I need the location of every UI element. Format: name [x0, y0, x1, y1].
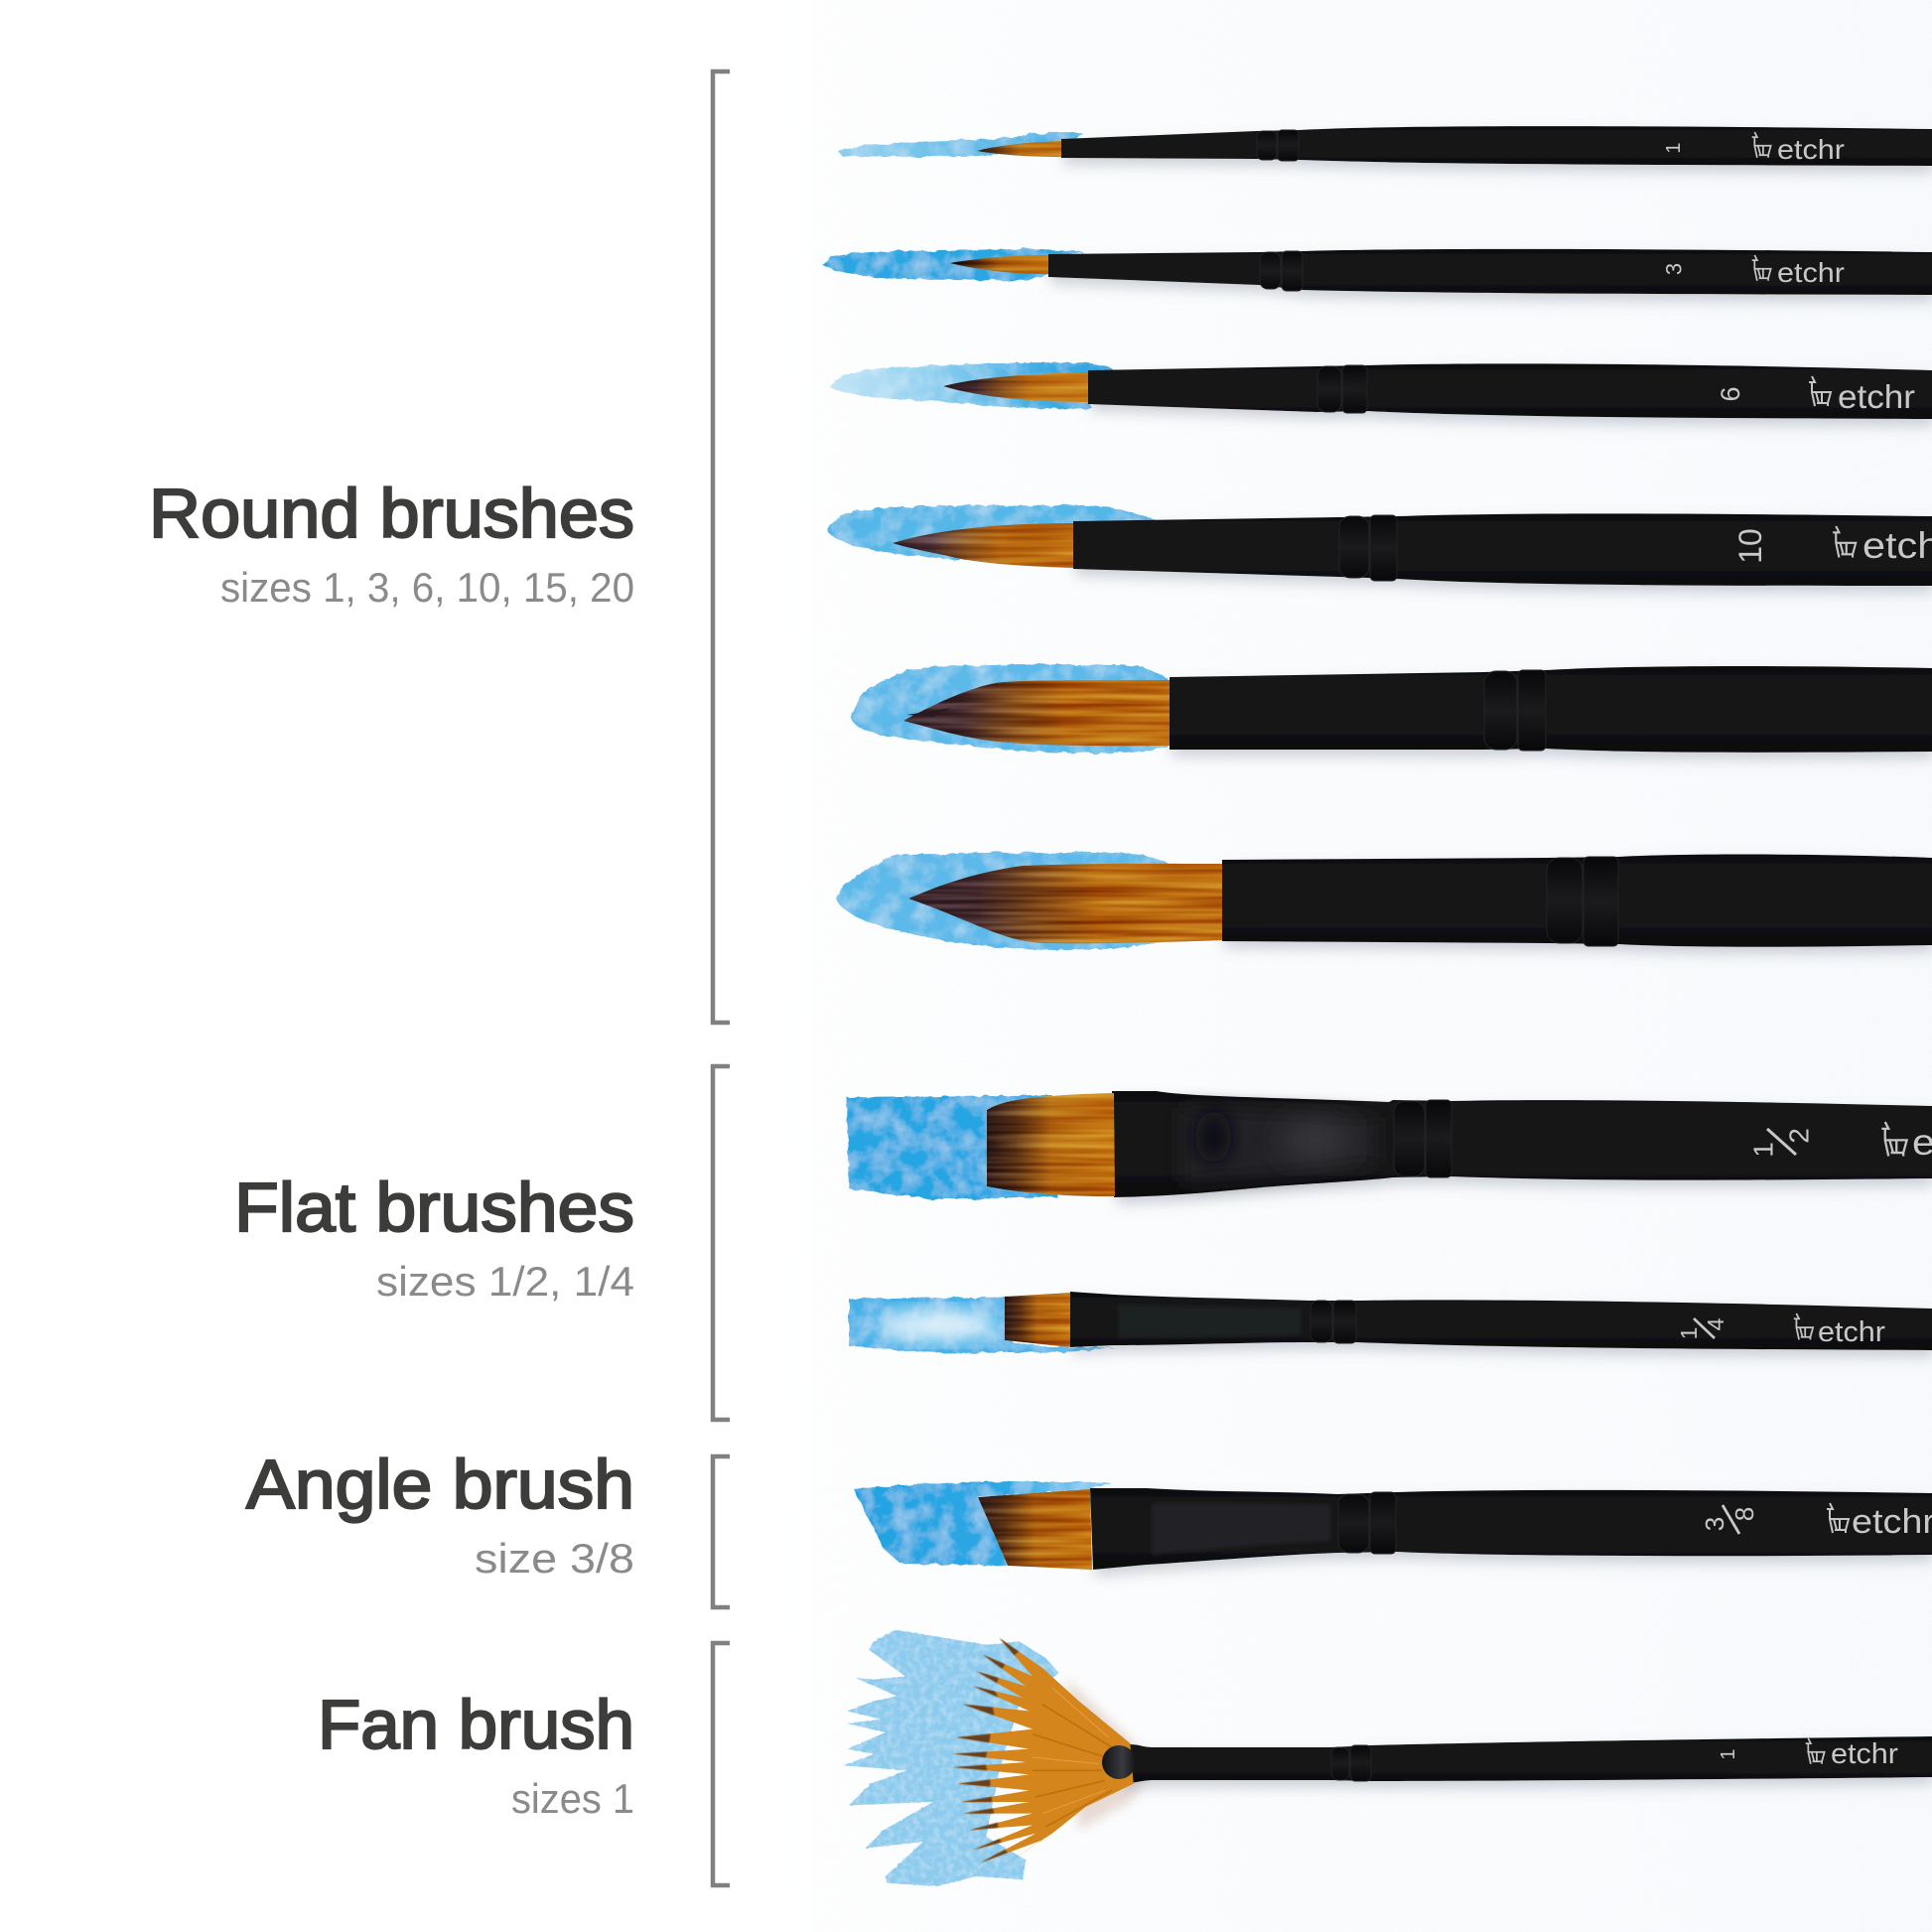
paint wash highlight — [877, 1311, 1000, 1340]
paint stroke — [822, 249, 1084, 280]
logo: etchr — [1818, 1316, 1885, 1348]
size number: 6 — [1716, 386, 1745, 402]
logo — [1881, 1122, 1932, 1163]
logo — [1794, 1313, 1885, 1348]
bracket: round brushes — [713, 71, 730, 1023]
handle — [1170, 666, 1932, 753]
ferrule shine — [1152, 1503, 1330, 1555]
ferrule shine — [1181, 1108, 1376, 1181]
handle — [1090, 1488, 1932, 1570]
handle — [1222, 854, 1932, 947]
size number: 1 — [1676, 1327, 1702, 1339]
panel: angle brush label — [246, 1446, 730, 1607]
panel: round brushes label — [149, 71, 730, 1023]
size number: 2 — [1783, 1128, 1815, 1144]
heading: round brushes: Round brushes — [149, 475, 634, 552]
handle — [1088, 363, 1932, 419]
ferrule rings — [1317, 365, 1367, 413]
logo: etchr — [1838, 378, 1915, 415]
bristles — [950, 255, 1048, 274]
heading: angle brush: Angle brush — [246, 1446, 634, 1523]
sizes: angle brush: size 3/8 — [475, 1535, 634, 1582]
size number: 1 — [1663, 142, 1685, 154]
fan shadow — [1065, 1678, 1149, 1830]
heading: fan brush: Fan brush — [318, 1686, 634, 1763]
handle — [1070, 1292, 1932, 1350]
logo: etchr — [1777, 134, 1845, 165]
paint stroke — [851, 664, 1168, 753]
brush: angle size 3/8 — [854, 1482, 1932, 1570]
bristles — [943, 372, 1088, 402]
handle — [1112, 1091, 1932, 1197]
bristles — [978, 1489, 1092, 1570]
handle — [1048, 249, 1932, 295]
paint stroke — [830, 362, 1117, 409]
bristles — [903, 680, 1170, 746]
bristle split tip — [906, 708, 951, 717]
size number: 10 — [1732, 528, 1768, 564]
brush: round size 10 — [827, 505, 1932, 586]
brush: round size 15 — [851, 664, 1932, 753]
size number: 4 — [1703, 1317, 1728, 1330]
size number: 3 — [1662, 263, 1686, 275]
logo: etchr — [1831, 1738, 1898, 1770]
brush: fan size 1 — [844, 1630, 1932, 1886]
ferrule rings — [1260, 251, 1303, 291]
heading: flat brushes: Flat brushes — [234, 1169, 634, 1246]
sizes: flat brushes: sizes 1/2, 1/4 — [376, 1258, 634, 1305]
sizes: round brushes: sizes 1, 3, 6, 10, 15, 20 — [220, 564, 634, 611]
bristles — [977, 141, 1061, 157]
size number — [1676, 1317, 1728, 1339]
ferrule rings — [1331, 1745, 1371, 1781]
brush: round size 3 — [822, 249, 1932, 295]
paint stroke — [849, 1297, 1114, 1353]
bracket: angle brush — [713, 1456, 730, 1607]
brush: round size 1 — [838, 126, 1932, 166]
paint stroke — [854, 1482, 1112, 1566]
logo: etchr — [1852, 1503, 1932, 1541]
ferrule rings — [1547, 857, 1618, 946]
bristles — [893, 523, 1073, 568]
panel: fan brush label — [318, 1643, 730, 1885]
logo — [1752, 132, 1845, 165]
handle — [1122, 1736, 1932, 1783]
ferrule rings — [1339, 515, 1397, 581]
ferrule rings — [1484, 670, 1546, 751]
panel: flat brushes label — [234, 1066, 730, 1420]
brush: flat size 1/2 — [847, 1091, 1932, 1199]
ferrule rings — [1394, 1100, 1451, 1177]
size number: 8 — [1729, 1507, 1759, 1521]
ferrule rings — [1338, 1492, 1396, 1554]
paint stroke — [844, 1630, 1059, 1886]
paint stroke — [847, 1095, 1056, 1199]
logo — [1752, 255, 1845, 288]
brush: round size 20 — [836, 853, 1932, 950]
size number — [1747, 1128, 1815, 1158]
paint stroke — [827, 505, 1161, 560]
handle — [1061, 126, 1932, 166]
bristles — [908, 864, 1222, 943]
size number: 3 — [1700, 1517, 1729, 1531]
ferrule rings — [1257, 130, 1299, 161]
size number: 1 — [1747, 1142, 1779, 1158]
bracket: fan brush — [713, 1643, 730, 1885]
logo — [1806, 1738, 1898, 1770]
ferrule ball — [1102, 1745, 1136, 1779]
size number: 1 — [1718, 1748, 1739, 1760]
size number — [1700, 1505, 1759, 1534]
bracket: flat brushes — [713, 1066, 730, 1420]
sizes: fan brush: sizes 1 — [511, 1775, 634, 1822]
bristles — [1005, 1293, 1070, 1347]
bristles — [953, 1638, 1134, 1876]
brush: flat size 1/4 — [849, 1292, 1932, 1353]
bristles — [987, 1093, 1115, 1196]
ferrule rings — [1311, 1301, 1356, 1343]
handle — [1073, 513, 1932, 586]
ferrule shine — [1118, 1305, 1301, 1337]
paint stroke — [838, 132, 1084, 157]
paint stroke — [836, 853, 1168, 950]
brush: round size 6 — [830, 362, 1932, 419]
logo: etchr — [1777, 257, 1845, 288]
logo — [1809, 376, 1915, 415]
